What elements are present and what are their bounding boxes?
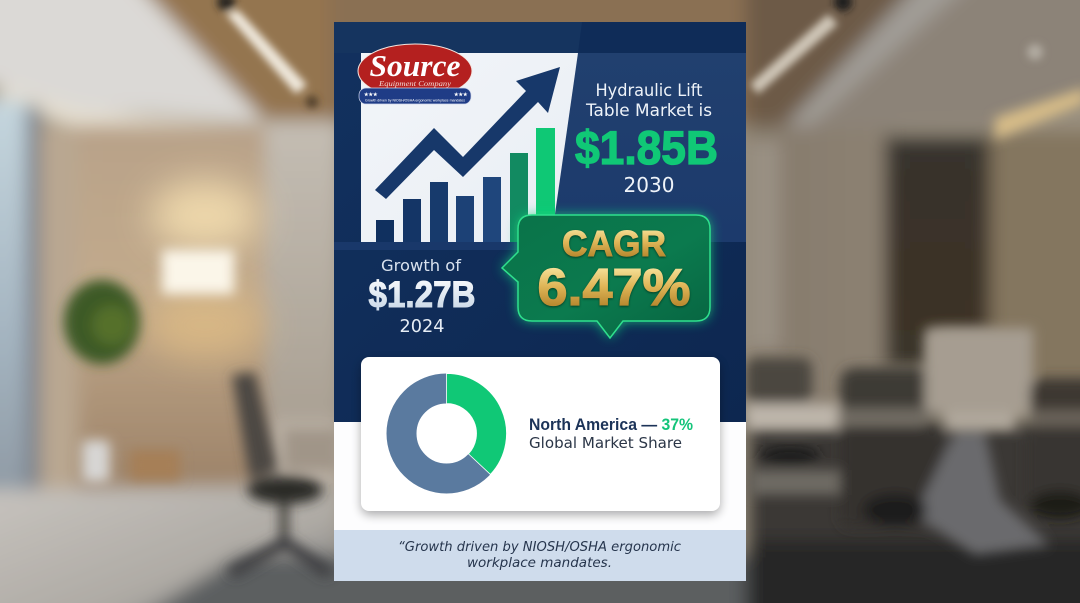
footer quote band <box>334 530 746 581</box>
logo banner <box>359 88 471 104</box>
warm glow <box>150 180 260 250</box>
lower white section <box>334 422 746 530</box>
market share label <box>529 416 693 452</box>
logo: Source Equipment Company: Equipment Company <box>378 79 452 88</box>
callout: CAGR speech bubble <box>502 215 710 338</box>
arrow: rising trend <box>375 67 560 199</box>
text block: 2024 growth <box>368 256 476 337</box>
plant <box>64 280 140 364</box>
right floor <box>746 420 1080 603</box>
lighter blue panel <box>551 53 746 242</box>
left wall <box>40 125 265 490</box>
floor <box>0 485 340 603</box>
window <box>0 100 26 495</box>
text block: 2030 market value: $1.85B <box>575 121 718 174</box>
callout: CAGR speech bubble: CAGR <box>562 223 666 264</box>
text block: 2024 growth: $1.27B <box>368 274 476 315</box>
footer quote band: workplace mandates. <box>467 555 612 571</box>
poster top navy background <box>334 22 746 423</box>
market share label: North America — 37% <box>529 416 693 434</box>
logo banner: ★★★ <box>454 92 468 98</box>
panel: market share card <box>361 357 720 515</box>
logo banner: ★★★ <box>364 92 378 98</box>
right wall <box>746 125 891 415</box>
ceiling lights <box>226 10 307 94</box>
warm ceiling strip <box>995 88 1080 140</box>
text block: 2030 market value: Hydraulic Lift <box>596 81 703 101</box>
bar chart <box>376 128 555 242</box>
footer quote band: “Growth driven by NIOSH/OSHA ergonomic <box>398 539 682 555</box>
wood ceiling <box>125 0 760 125</box>
panel: chart background <box>361 53 578 242</box>
logo: Source Equipment Company <box>358 44 472 104</box>
pillar <box>265 120 340 420</box>
text block: 2030 market value: 2030 <box>624 173 674 197</box>
right chairs <box>746 358 812 403</box>
left chair <box>232 372 278 480</box>
text block: 2030 market value <box>575 81 718 197</box>
logo: Source Equipment Company: Source <box>370 48 461 83</box>
market share label: Global Market Share <box>529 434 682 452</box>
text block: 2024 growth: 2024 <box>400 316 444 337</box>
left ceiling <box>0 0 262 122</box>
callout: CAGR speech bubble: 6.47% <box>538 259 690 317</box>
infographic poster <box>334 22 746 581</box>
text block: 2030 market value: Table Market is <box>585 101 712 121</box>
right ceiling <box>785 0 1080 130</box>
donut chart <box>402 374 507 478</box>
logo banner: Growth driven by NIOSH/OSHA ergonomic workplace mandates <box>365 98 465 102</box>
text block: 2024 growth: Growth of <box>381 256 461 275</box>
navy band <box>334 242 530 250</box>
lamp <box>162 250 234 294</box>
